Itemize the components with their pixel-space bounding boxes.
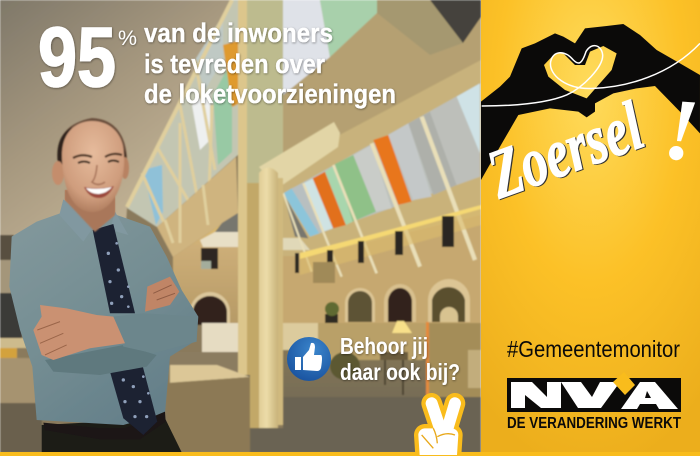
rear wall behind wing — [173, 213, 238, 323]
headline text: van de inwoners — [144, 18, 333, 48]
dark wall windows — [295, 216, 454, 273]
viewer-left hand — [33, 305, 125, 360]
percent sign: % — [118, 27, 137, 50]
sill below skylight — [283, 85, 481, 256]
reception desks — [202, 323, 238, 353]
call to action text: daar ook bij? — [340, 359, 460, 385]
white line with heart loop — [482, 43, 700, 106]
title: Zoersel!: Zoersel — [477, 88, 653, 214]
person: smiling man with crossed arms — [9, 190, 198, 452]
pillars — [240, 0, 283, 183]
letter V — [561, 382, 620, 408]
viewer-right hand — [145, 277, 179, 312]
lower interior — [283, 323, 481, 453]
logo: N-VA — [507, 372, 681, 432]
headline text: de loketvoorzieningen — [144, 79, 396, 109]
letter A — [621, 382, 678, 409]
upper sleeve — [113, 313, 197, 353]
left side interior — [0, 235, 14, 260]
trousers — [42, 418, 182, 452]
background photo: atrium interior — [0, 0, 481, 453]
arches — [345, 279, 470, 322]
hanging box — [313, 262, 335, 283]
rear window — [201, 248, 218, 269]
headline text: is tevreden over — [144, 49, 325, 79]
head — [52, 118, 129, 232]
letter N — [511, 382, 561, 408]
rear arch — [190, 292, 230, 325]
tie — [93, 224, 157, 435]
bottom yellow rule — [0, 452, 700, 456]
atrium wall — [283, 165, 481, 325]
neck — [65, 190, 115, 230]
shirt torso — [9, 200, 198, 425]
icon: heart-shaped hands silhouette — [481, 24, 700, 180]
light strip — [300, 205, 481, 259]
potted plant on counter — [325, 302, 339, 323]
coloured skylight — [283, 83, 480, 277]
headline statistic — [38, 10, 396, 109]
logo diamond — [613, 372, 635, 395]
upper right structure — [240, 0, 481, 200]
cream wing below windows — [157, 157, 238, 257]
headline text — [144, 18, 396, 109]
panel: yellow sidebar — [477, 0, 700, 452]
title: Zoersel!: Zoersel — [479, 88, 655, 215]
number 95: 95 — [38, 10, 116, 104]
call to action text: Behoor jij — [340, 333, 428, 359]
icon: thumbs up badge — [287, 337, 331, 381]
left skylight wing — [127, 0, 240, 257]
skylight frame — [283, 60, 481, 200]
icon: victory hand — [422, 403, 455, 460]
belt — [43, 412, 166, 439]
collar — [59, 199, 95, 242]
lower forearm — [45, 345, 157, 375]
call to action text — [340, 333, 460, 385]
ceiling — [0, 0, 232, 250]
